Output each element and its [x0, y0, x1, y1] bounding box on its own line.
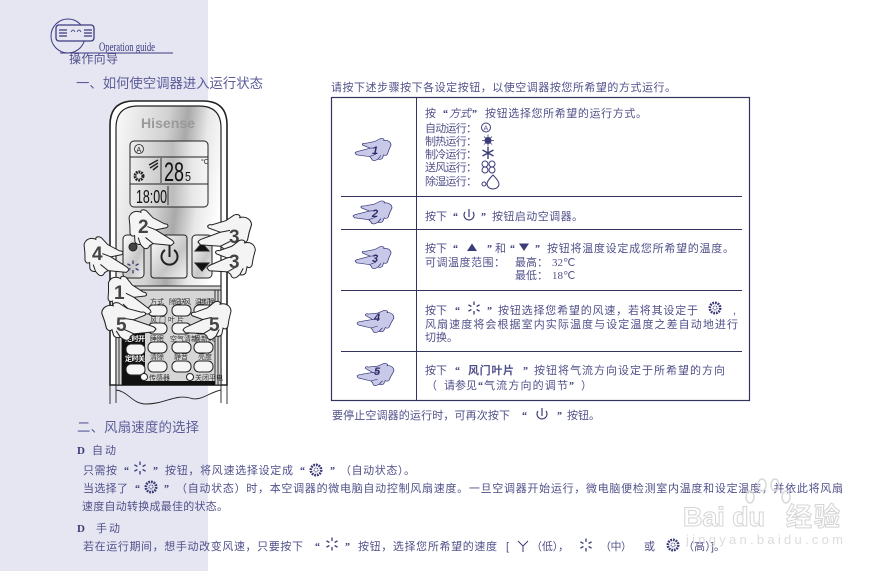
- step 3 text: 32℃: [552, 257, 575, 269]
- hand pointer 3 upper: 3: [229, 227, 240, 248]
- step 5 text: [425, 363, 725, 392]
- hand pointer 3 lower: 3: [229, 252, 240, 273]
- step 3 icon: 3: [372, 253, 378, 265]
- step 5 text: （: [426, 379, 437, 392]
- step 4 text: 切换。: [425, 330, 458, 344]
- manual paragraph: 按钮，选择您所希望的速度: [358, 539, 497, 553]
- step 1 text: 按: [425, 106, 436, 120]
- step 5 text: “: [478, 381, 483, 392]
- step 4 icon: [356, 308, 395, 334]
- step 3 text: 可调温度范围：: [425, 255, 505, 269]
- step 1 icon: 1: [372, 145, 378, 157]
- auto paragraph: ”: [330, 466, 335, 477]
- step 4 text: 按下: [425, 303, 447, 317]
- lower key panel: 清除: [150, 352, 164, 361]
- step 5 text: 风门叶片: [468, 363, 514, 377]
- step 5 text: 气流方向的调节: [484, 378, 568, 392]
- manual paragraph: （高）]。: [683, 539, 725, 553]
- LCD display: [130, 141, 209, 207]
- step 3 text: “: [453, 244, 458, 255]
- step 3 icon: [355, 246, 391, 269]
- step 1 text: ”: [472, 109, 477, 120]
- lower key panel: 睡眠: [150, 335, 164, 343]
- stop instruction: ”: [557, 411, 562, 422]
- step 4 text: 按钮选择您希望的风速，若将其设定于: [498, 303, 698, 317]
- header subtitle: Operation guide: Operation guide: [99, 39, 155, 54]
- manual paragraph: [83, 538, 725, 553]
- step 3 text: 和: [495, 242, 506, 255]
- header logo: air conditioner badge: [51, 19, 173, 53]
- step 2 icon: [353, 201, 392, 224]
- auto paragraph: （自动状态）。: [340, 463, 415, 477]
- manual subsection label: D: [77, 523, 85, 535]
- lower key panel: 风门叶片: [150, 315, 184, 324]
- step 5 text: 请参见: [444, 378, 477, 392]
- step 2 text: 按下: [425, 209, 447, 223]
- watermark: Baidu jingyan: Bai du: [683, 502, 765, 532]
- step 3 text: 按钮将温度设定成您所希望的温度。: [547, 241, 734, 255]
- step 5 text: ）: [581, 379, 592, 392]
- hand pointer 5 right: 5: [209, 315, 220, 336]
- LCD display: 18:00: [136, 187, 167, 207]
- remote body: [110, 101, 227, 385]
- section heading 2: 二、风扇速度的选择: [77, 420, 200, 435]
- step 1 icon: [355, 138, 391, 161]
- watermark: Baidu jingyan: 经验: [786, 502, 840, 532]
- steps table: [332, 97, 750, 400]
- lower key panel: 温度切换: [195, 297, 215, 306]
- watermark: Baidu jingyan: [683, 479, 843, 547]
- auto paragraph: 只需按: [83, 463, 117, 477]
- hand pointer 2: [122, 207, 180, 255]
- auto paragraph: “: [135, 484, 140, 495]
- LCD display: 28: [164, 157, 184, 187]
- lower key panel: 除湿送风: [169, 297, 191, 306]
- step 5 icon: [356, 361, 395, 387]
- watermark: Baidu jingyan: jingyan.baidu.com: [685, 532, 843, 547]
- stop instruction: 要停止空调器的运行时，可再次按下: [332, 408, 510, 422]
- remote bottom cut-away: [110, 385, 227, 404]
- auto paragraph: ”: [153, 466, 158, 477]
- auto paragraph: ”: [164, 484, 169, 495]
- manual subsection label: 手动: [96, 521, 120, 535]
- step 3 text: ”: [487, 244, 492, 255]
- step 2 text: ”: [481, 212, 486, 223]
- header title: 操作向导: [69, 51, 118, 66]
- step 1 text: 方式: [449, 107, 473, 120]
- step 5 text: 按钮将气流方向设定于所希望的方向: [534, 363, 725, 377]
- auto subsection label: D: [77, 445, 85, 457]
- step 5 icon: 5: [374, 366, 381, 378]
- hand pointer 5 left: 5: [116, 315, 127, 336]
- step 4 text: 风扇速度将会根据室内实际温度与设定温度之差自动地进行: [425, 317, 738, 331]
- manual paragraph: ”: [345, 542, 350, 553]
- LCD display: 5: [185, 169, 191, 184]
- lower key panel: 静音: [174, 352, 188, 361]
- lower key panel: 空气清新: [170, 334, 198, 343]
- auto subsection label: 自动: [92, 444, 116, 457]
- lower key panel: 亮度: [198, 352, 212, 361]
- remote control illustration: [77, 101, 258, 404]
- step 4 text: “: [455, 306, 460, 317]
- step 3 text: 按下: [425, 241, 447, 255]
- step 1 text: 制热运行：: [425, 135, 477, 148]
- step 4 text: [425, 302, 738, 344]
- lower key panel: 方式: [150, 297, 164, 306]
- hand pointer 4: 4: [92, 244, 103, 265]
- hand pointer 2: 2: [138, 217, 149, 238]
- lower key panel: 定时开: [125, 334, 145, 343]
- hand pointer 3 upper: [196, 213, 254, 255]
- step 3 text: 18℃: [552, 270, 575, 282]
- step 3 text: “: [510, 244, 515, 255]
- lower key panel: 换新风: [194, 334, 215, 343]
- step 1 text: 制冷运行：: [425, 148, 477, 161]
- step 5 text: 按下: [425, 363, 447, 377]
- step 1 text: 按钮选择您所希望的运行方式。: [485, 106, 647, 120]
- step 2 icon: 2: [371, 208, 378, 220]
- step 2 text: [425, 209, 583, 223]
- manual paragraph: [: [506, 541, 509, 553]
- hand pointer 1: [100, 272, 159, 324]
- step 1 text: 除湿运行：: [425, 174, 477, 188]
- step 4 text: ,: [733, 305, 736, 317]
- auto paragraph: （自动状态）时，本空调器的微电脑自动控制风扇速度。一旦空调器开始运行，微电脑便检测室内温度和设定温度，并依此将风扇: [176, 481, 843, 495]
- step 1 text: [425, 106, 647, 189]
- manual paragraph: 若在运行期间，想手动改变风速，只要按下: [83, 539, 303, 553]
- step 3 text: ”: [535, 244, 540, 255]
- manual paragraph: “: [315, 542, 320, 553]
- brand logo: Hisense: [141, 115, 195, 131]
- auto paragraph: [82, 462, 843, 513]
- step 3 text: 最高：: [515, 255, 548, 269]
- intro sentence: 请按下述步骤按下各设定按钮，以使空调器按您所希望的方式运行。: [331, 80, 676, 94]
- auto paragraph: “: [124, 466, 129, 477]
- auto paragraph: 速度自动转换成最佳的状态。: [82, 499, 228, 513]
- lower key panel: 关闭平电: [195, 373, 223, 382]
- hand pointer 5 right: [180, 300, 234, 343]
- LCD display: °C: [201, 158, 209, 166]
- step 5 text: ”: [569, 381, 574, 392]
- step 1 text: 自动运行：: [425, 122, 477, 135]
- manual paragraph: （低），: [531, 540, 569, 553]
- hand pointer 3 lower: [204, 239, 258, 281]
- manual paragraph: 或: [644, 540, 655, 553]
- lower key panel: [116, 286, 223, 385]
- hand pointer 1: 1: [114, 283, 125, 304]
- manual paragraph: （中）: [600, 540, 632, 553]
- manual subsection label: [77, 521, 120, 535]
- hand pointer 4: [77, 234, 135, 282]
- step 3 text: 最低：: [515, 269, 548, 282]
- auto paragraph: “: [300, 466, 305, 477]
- table frame and rules: [332, 97, 750, 400]
- step 1 text: A: [484, 126, 488, 132]
- stop instruction: [332, 408, 600, 422]
- lower key panel: 定时关: [125, 354, 145, 363]
- LCD display: A: [136, 147, 142, 154]
- step 1 text: “: [443, 109, 448, 120]
- step 3 text: [425, 241, 734, 282]
- hand pointer 5 left: [100, 302, 157, 342]
- step 5 text: “: [455, 366, 460, 377]
- stop instruction: “: [522, 411, 527, 422]
- lower key panel: 传感器: [149, 373, 170, 382]
- section heading 1: 一、如何使空调器进入运行状态: [76, 75, 263, 91]
- step 4 text: ”: [487, 306, 492, 317]
- main buttons: [123, 235, 212, 278]
- step 2 text: 按钮启动空调器。: [492, 209, 583, 223]
- step 1 text: 送风运行：: [425, 160, 477, 174]
- step 2 text: “: [453, 212, 458, 223]
- step 4 icon: 4: [373, 312, 380, 324]
- auto paragraph: 按钮，将风速选择设定成: [165, 463, 293, 477]
- step 5 text: ”: [523, 366, 528, 377]
- stop instruction: 按钮。: [567, 408, 600, 422]
- sidebar background: [0, 0, 208, 571]
- auto subsection label: [77, 444, 116, 457]
- auto paragraph: 当选择了: [83, 481, 128, 495]
